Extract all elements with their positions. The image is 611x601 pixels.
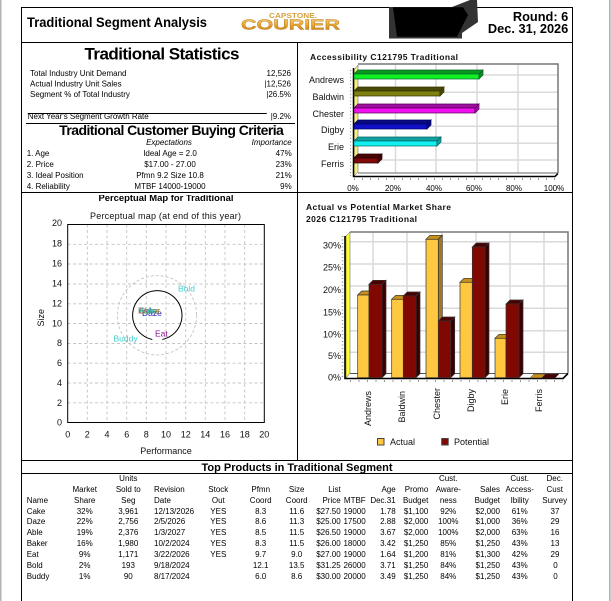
accessibility chart title: Accessibility C121795 Traditional — [310, 52, 458, 62]
percent axis labels: 0% — [328, 373, 341, 383]
header: Capstone Courier logo: CAPSTONE. — [269, 11, 317, 20]
inner ideal-spot circle — [133, 291, 182, 340]
panel: market share chart — [306, 202, 568, 447]
statistic: segment share: Segment % of Total Industry — [30, 90, 130, 99]
table row: Able: 19% — [77, 528, 93, 537]
table row: Baker: 18000 — [343, 539, 366, 548]
column headers: Importance — [252, 138, 292, 147]
company labels: Chester — [432, 388, 442, 420]
table row: Buddy: 3.49 — [380, 572, 396, 581]
y axis numbers: 14 — [52, 278, 62, 288]
statistic: unit sales: |12,526 — [264, 80, 292, 89]
table row: Eat: 9.7 — [255, 550, 267, 559]
bars: Erie — [495, 300, 523, 378]
table row: Buddy: $1,250 — [476, 572, 501, 581]
table row: Able: 63% — [512, 528, 528, 537]
table row: Bold: $1,250 — [476, 561, 501, 570]
perceptual map subtitle: Perceptual map (at end of this year) — [90, 211, 241, 221]
statistic: unit demand: Total Industry Unit Demand — [30, 69, 126, 78]
column headers: Expectations — [146, 138, 192, 147]
table row: Bold: $31.25 — [316, 561, 341, 570]
market share chart title: 2026 C121795 Traditional — [306, 214, 417, 224]
x axis numbers: 14 — [200, 430, 210, 440]
bars: Digby — [460, 243, 489, 378]
statistic: growth rate: |9.2% — [271, 112, 291, 121]
x axis numbers: 6 — [124, 430, 129, 440]
table row: Daze: 22% — [77, 517, 93, 526]
table row: Daze: 29 — [551, 517, 560, 526]
table row: Baker: 3.42 — [380, 539, 396, 548]
statistic: unit demand: 12,526 — [267, 69, 292, 78]
category labels — [309, 75, 344, 169]
header: round and date — [488, 9, 568, 36]
header: title: Traditional Segment Analysis — [27, 14, 207, 30]
x axis numbers: 4 — [104, 430, 110, 440]
table row: Eat: $1,300 — [476, 550, 501, 559]
x axis numbers: 2 — [85, 430, 90, 440]
criterion: price: 2. Price — [27, 160, 54, 169]
table row: Daze: 11.3 — [289, 517, 305, 526]
table row: Eat: YES — [210, 550, 226, 559]
legend — [378, 437, 489, 447]
table row: Daze: 8.6 — [255, 517, 267, 526]
criterion: price: 23% — [276, 160, 292, 169]
table row: Daze: 2/5/2026 — [154, 517, 186, 526]
table row: Buddy: 84% — [440, 572, 456, 581]
table row: Cake: 12/13/2026 — [154, 507, 195, 516]
criterion: age: 1. Age — [27, 149, 50, 158]
table row: Bold: 193 — [122, 561, 136, 570]
table row: Eat: $27.00 — [316, 550, 341, 559]
table column headers: Budget — [403, 496, 429, 505]
table row: Buddy: 1% — [79, 572, 90, 581]
product labels: Bold — [178, 284, 195, 294]
category labels: Ferris — [321, 159, 344, 169]
category labels: Erie — [328, 142, 344, 152]
map grid — [68, 224, 264, 422]
product labels: Able — [139, 306, 156, 316]
table row: Eat: 81% — [440, 550, 456, 559]
table row: Buddy: 8.6 — [291, 572, 303, 581]
criterion: reliability: 9% — [280, 182, 292, 191]
bar: Andrews — [354, 70, 483, 79]
criterion: reliability — [27, 182, 292, 191]
table heading: Top Products in Traditional Segment — [202, 462, 393, 474]
table row: Bold: 3.71 — [380, 561, 396, 570]
statistic: growth rate — [27, 110, 291, 121]
bar: Chester — [354, 104, 479, 113]
percent axis labels: 5% — [328, 351, 341, 361]
table row: Baker — [27, 539, 560, 548]
table row: Daze: Daze — [27, 517, 46, 526]
table row: Daze: 100% — [438, 517, 459, 526]
table column headers: Sold to — [116, 485, 141, 494]
statistic: segment share — [30, 90, 291, 99]
table row: Eat: 1.64 — [380, 550, 396, 559]
y axis numbers: 20 — [52, 218, 62, 228]
percent axis labels: 30% — [323, 241, 341, 251]
header: round and date: Dec. 31, 2026 — [488, 21, 568, 36]
bar: Baldwin — [354, 87, 444, 96]
criterion: reliability: 4. Reliability — [27, 182, 70, 191]
table row: Cake: 19000 — [343, 507, 366, 516]
company labels: Andrews — [363, 390, 373, 426]
y axis numbers: 18 — [52, 238, 62, 248]
table row: Baker: $26.00 — [316, 539, 341, 548]
table column headers: ness — [440, 496, 457, 505]
table row: Cake: 3,961 — [118, 507, 139, 516]
y axis title: Size — [36, 309, 46, 326]
company labels: Baldwin — [397, 391, 407, 423]
product labels: Buddy — [114, 334, 138, 344]
table row: Able: 1/3/2027 — [154, 528, 186, 537]
bars: Chester — [426, 235, 455, 378]
table row: Baker: Baker — [27, 539, 48, 548]
table row: Buddy: $1,250 — [404, 572, 429, 581]
criterion: ideal position — [27, 171, 292, 180]
y axis numbers: 8 — [57, 338, 62, 348]
table column headers: Share — [74, 496, 96, 505]
criterion: price: $17.00 - 27.00 — [144, 160, 196, 169]
company labels: Digby — [466, 389, 476, 412]
table row: Bold: $1,250 — [404, 561, 429, 570]
x axis numbers: 8 — [144, 430, 149, 440]
table row: Daze: $25.00 — [316, 517, 341, 526]
table row: Bold: 43% — [512, 561, 528, 570]
table column headers: MTBF — [344, 496, 366, 505]
percent axis labels: 100% — [544, 184, 564, 193]
percent axis labels: 0% — [347, 184, 359, 193]
x axis numbers — [65, 430, 269, 440]
table row: Able: Able — [27, 528, 43, 537]
table row: Cake: 11.6 — [289, 507, 305, 516]
table row: Able: 100% — [438, 528, 459, 537]
table row: Buddy: 43% — [512, 572, 528, 581]
table row: Eat: 1,171 — [118, 550, 139, 559]
bar: Digby — [354, 120, 431, 129]
panel: traditional statistics — [27, 45, 292, 121]
table column headers: Cust. — [439, 474, 458, 483]
percent axis labels: 80% — [506, 184, 522, 193]
panel: perceptual map — [36, 193, 269, 456]
table row: Daze — [27, 517, 560, 526]
table row: Daze: 17500 — [343, 517, 366, 526]
company labels: Ferris — [534, 389, 544, 412]
table column headers: Ibility — [511, 496, 529, 505]
bars: Ferris — [530, 374, 559, 378]
table row: Cake: $1,100 — [404, 507, 429, 516]
x axis title: Performance — [140, 446, 192, 456]
table row: Cake: $27.50 — [316, 507, 341, 516]
table row: Cake: 32% — [77, 507, 93, 516]
table column headers: Date — [154, 496, 171, 505]
percent axis labels: 15% — [323, 308, 341, 318]
y axis numbers: 6 — [57, 358, 62, 368]
table column headers: Market — [72, 485, 98, 494]
criterion: reliability: MTBF 14000-19000 — [134, 182, 206, 191]
table row: Baker: $1,250 — [476, 539, 501, 548]
y axis numbers: 16 — [52, 258, 62, 268]
table row: Buddy: $30.00 — [316, 572, 341, 581]
y axis numbers: 0 — [57, 418, 62, 428]
table row: Bold: 2% — [79, 561, 90, 570]
table row: Eat: 3/22/2026 — [154, 550, 190, 559]
table row: Cake: Cake — [27, 507, 46, 516]
table row: Able: 2,376 — [118, 528, 139, 537]
table column headers: Pfmn — [251, 485, 270, 494]
y axis numbers: 2 — [57, 398, 62, 408]
table row: Cake: $2,000 — [476, 507, 501, 516]
y axis numbers: 10 — [52, 318, 62, 328]
legend: Actual — [390, 437, 415, 447]
table row: Baker: $1,250 — [404, 539, 429, 548]
table row: Able: $2,000 — [404, 528, 429, 537]
y axis numbers: 4 — [57, 378, 62, 388]
table row: Baker: 8.3 — [255, 539, 267, 548]
table row: Daze: 36% — [512, 517, 528, 526]
table column headers: Seg — [121, 496, 135, 505]
percent axis labels — [347, 184, 564, 193]
criterion: ideal position: Pfmn 9.2 Size 10.8 — [136, 171, 204, 180]
bar: Ferris — [354, 154, 382, 163]
category labels: Baldwin — [312, 92, 344, 102]
table column headers: Promo — [405, 485, 429, 494]
percent axis labels: 20% — [323, 285, 341, 295]
statistic: unit sales — [30, 80, 292, 89]
table column headers: Coord — [286, 496, 308, 505]
table column headers: Survey — [542, 496, 567, 505]
table row: Buddy: 0 — [553, 572, 558, 581]
table row: Baker: 13 — [551, 539, 560, 548]
divider line — [26, 122, 295, 124]
table column headers: Stock — [208, 485, 229, 494]
table row: Buddy: 8/17/2024 — [154, 572, 190, 581]
table row: Able: 19000 — [343, 528, 366, 537]
table row: Bold: 13.5 — [289, 561, 305, 570]
table row: Eat: 9.0 — [291, 550, 303, 559]
table row: Baker: 85% — [440, 539, 456, 548]
percent axis labels: 40% — [426, 184, 442, 193]
table row: Bold: 0 — [553, 561, 558, 570]
table row: Eat: 19000 — [343, 550, 366, 559]
x axis numbers: 0 — [65, 430, 70, 440]
table row: Able: YES — [210, 528, 226, 537]
category labels: Digby — [321, 125, 344, 135]
legend: Potential — [454, 437, 489, 447]
table row: Buddy: 6.0 — [255, 572, 267, 581]
table row: Cake — [27, 507, 560, 516]
table row: Eat: Eat — [27, 550, 39, 559]
percent axis labels: 25% — [323, 263, 341, 273]
chart walls and grid — [350, 64, 558, 179]
table row: Able: 3.67 — [380, 528, 396, 537]
table column headers: Aware- — [436, 485, 461, 494]
criterion: age — [27, 149, 292, 158]
category labels: Andrews — [309, 75, 344, 85]
percent axis labels: 20% — [385, 184, 401, 193]
criterion: price — [27, 160, 292, 169]
bars: Andrews — [358, 280, 386, 378]
perceptual map heading: Perceptual Map for Traditional — [98, 193, 234, 203]
table column headers: Coord — [250, 496, 272, 505]
table row: Bold: Bold — [27, 561, 43, 570]
table row: Able: $26.50 — [316, 528, 341, 537]
table row: Baker: 11.5 — [289, 539, 305, 548]
statistic: growth rate: Next Year's Segment Growth Rate — [28, 112, 149, 121]
panel: buying criteria — [27, 122, 292, 191]
table column headers: List — [328, 485, 341, 494]
y axis numbers: 12 — [52, 298, 62, 308]
chart walls and grid — [342, 232, 568, 381]
table column headers: Price — [322, 496, 341, 505]
table row: Baker: YES — [210, 539, 226, 548]
table row: Eat: 29 — [551, 550, 560, 559]
table column headers: Dec.31 — [370, 496, 396, 505]
x axis numbers: 20 — [259, 430, 269, 440]
category labels: Chester — [312, 109, 344, 119]
table row: Daze: $1,000 — [476, 517, 501, 526]
table column headers — [27, 474, 567, 505]
bar: Erie — [354, 137, 441, 146]
map frame — [68, 224, 264, 422]
table column headers: Cust. — [510, 474, 529, 483]
table row: Cake: YES — [210, 507, 226, 516]
statistic: unit sales: Actual Industry Unit Sales — [30, 80, 122, 89]
criterion: ideal position: 3. Ideal Position — [27, 171, 84, 180]
table row: Bold: 9/18/2024 — [154, 561, 190, 570]
x axis numbers: 16 — [220, 430, 230, 440]
table row: Eat: 42% — [512, 550, 528, 559]
table column headers: Size — [289, 485, 305, 494]
product labels: Daze — [142, 308, 162, 318]
percent axis labels: 60% — [466, 184, 482, 193]
bars: Baldwin — [392, 292, 420, 378]
table column headers: Name — [27, 496, 49, 505]
criterion: ideal position: 21% — [276, 171, 292, 180]
criterion: age: 47% — [276, 149, 292, 158]
table row: Cake: 1.78 — [380, 507, 396, 516]
table row: Able: $2,000 — [476, 528, 501, 537]
table row: Buddy: 90 — [124, 572, 133, 581]
buying criteria heading: Traditional Customer Buying Criteria — [59, 122, 284, 138]
table row: Able: 11.5 — [289, 528, 305, 537]
company labels — [363, 388, 544, 426]
table row: Cake: 92% — [440, 507, 456, 516]
table row: Buddy — [27, 572, 558, 581]
redaction blot — [389, 0, 478, 38]
product labels: Eat — [155, 328, 168, 338]
table row: Eat: $1,200 — [404, 550, 429, 559]
table row: Bold: 12.1 — [253, 561, 269, 570]
percent axis labels: 10% — [323, 330, 341, 340]
table row: Able: 8.5 — [255, 528, 267, 537]
table column headers: Age — [381, 485, 396, 494]
table row: Bold: 84% — [440, 561, 456, 570]
market share chart title: Actual vs Potential Market Share — [306, 202, 451, 212]
table row: Bold: 26000 — [343, 561, 366, 570]
table row: Buddy: Buddy — [27, 572, 49, 581]
header: round and date: Round: 6 — [513, 9, 568, 24]
table column headers: Cust — [546, 485, 564, 494]
outer ideal-spot circle — [117, 276, 197, 355]
table row: Bold — [27, 561, 558, 570]
header: Capstone Courier logo — [241, 11, 340, 34]
table column headers: Out — [212, 496, 226, 505]
y axis numbers — [52, 218, 62, 428]
table column headers: Revision — [154, 485, 185, 494]
table row: Eat: 9% — [79, 550, 90, 559]
statistic: unit demand — [30, 69, 292, 78]
x axis numbers: 18 — [240, 430, 250, 440]
table row: Cake: 8.3 — [255, 507, 267, 516]
table row: Cake: 37 — [551, 507, 560, 516]
x axis numbers: 10 — [161, 430, 171, 440]
table row: Buddy: 20000 — [343, 572, 366, 581]
x axis numbers: 12 — [181, 430, 191, 440]
percent axis labels — [323, 241, 341, 383]
table row: Eat — [27, 550, 560, 559]
company labels: Erie — [500, 389, 510, 405]
table row: Able — [27, 528, 560, 537]
table row: Daze: YES — [210, 517, 226, 526]
table row: Baker: 10/2/2024 — [154, 539, 190, 548]
table column headers: Dec. — [546, 474, 563, 483]
table column headers: Access- — [505, 485, 534, 494]
product labels: Baker — [138, 306, 160, 316]
panel: top products table — [27, 462, 567, 581]
table row: Baker: 1,980 — [118, 539, 139, 548]
table row: Daze: 2.88 — [380, 517, 396, 526]
product labels: Cake — [139, 306, 159, 316]
table column headers: Units — [119, 474, 137, 483]
product labels — [114, 284, 195, 344]
criterion: age: Ideal Age = 2.0 — [143, 149, 197, 158]
statistics heading: Traditional Statistics — [84, 45, 240, 64]
table row: Cake: 61% — [512, 507, 528, 516]
header: Capstone Courier logo: COURIER — [241, 16, 340, 34]
panel: accessibility bar chart — [309, 52, 564, 193]
table row: Daze: 2,756 — [118, 517, 139, 526]
table row: Daze: $2,000 — [404, 517, 429, 526]
table column headers: Budget — [475, 496, 501, 505]
table column headers: Sales — [480, 485, 500, 494]
table row: Baker: 43% — [512, 539, 528, 548]
table row: Able: 16 — [551, 528, 560, 537]
market share chart title — [306, 202, 451, 224]
table row: Baker: 16% — [77, 539, 93, 548]
column headers — [146, 138, 292, 147]
statistic: segment share: |26.5% — [266, 90, 291, 99]
